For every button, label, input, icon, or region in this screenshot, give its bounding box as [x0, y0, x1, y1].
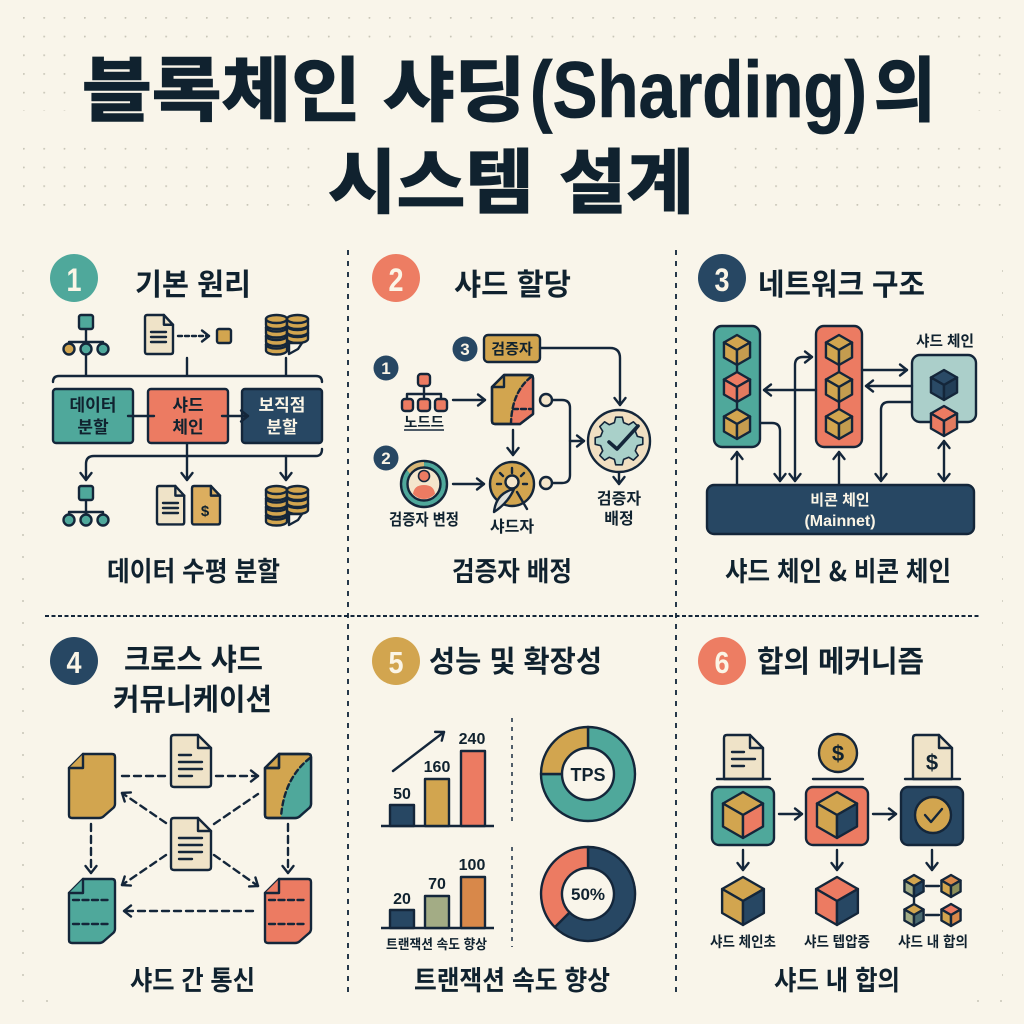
- arrow doc to shard: [512, 430, 514, 455]
- large cube gold: [722, 877, 764, 925]
- dashed separator: [511, 718, 513, 947]
- icon: validator ring: [401, 461, 447, 507]
- number badge 6: [698, 637, 746, 685]
- step two coin and box: $: [832, 741, 844, 766]
- step one document and box: [712, 735, 774, 845]
- number badge 2: 2: [388, 262, 404, 298]
- document coral: [265, 879, 311, 943]
- number badge 2: [372, 254, 420, 302]
- box: data split: [53, 389, 133, 443]
- box: third split: [242, 389, 322, 443]
- heading 6: 합의 메커니즘: [757, 637, 924, 681]
- title: [82, 35, 936, 228]
- bar chart bottom: [381, 857, 494, 953]
- network arrows: [737, 357, 944, 484]
- box: data split: 분할: [77, 413, 109, 438]
- center document top: [171, 735, 211, 787]
- step badge 1: [374, 356, 398, 380]
- validator assignment label: 검증자: [597, 485, 641, 509]
- title: 블록체인: [82, 35, 361, 136]
- heading 4: 커뮤니케이션: [113, 675, 272, 719]
- validator tag: [484, 335, 540, 362]
- caption 4: 샤드 간 통신: [130, 959, 255, 998]
- cube labels: 샤드 내 합의: [898, 931, 968, 952]
- title: 시스템: [328, 127, 534, 228]
- bar chart top: 160: [424, 759, 450, 776]
- shard chain label: 샤드 체인: [916, 330, 974, 351]
- heading 4: [113, 635, 272, 719]
- validator assignment label: [597, 485, 641, 529]
- heading 2: 샤드 할당: [454, 260, 571, 304]
- heading 5: 성능 및 확장성: [429, 637, 602, 681]
- heading 3: 네트워크 구조: [758, 260, 925, 304]
- heading 4: 크로스 샤드: [124, 635, 263, 679]
- shard chain column coral: [816, 326, 862, 447]
- box: data split: 데이터: [70, 391, 116, 416]
- beacon chain bar: (Mainnet): [804, 513, 876, 530]
- bar chart bottom: 20: [393, 891, 411, 908]
- donut: 50%: [541, 847, 635, 941]
- number badge 4: [50, 637, 98, 685]
- icon: gear with check: [588, 410, 650, 472]
- connector from shard and doc to gear: [540, 394, 584, 489]
- box: third split: 분할: [266, 413, 298, 438]
- bar chart bottom: 100: [459, 857, 485, 874]
- node label: 노드드: [404, 412, 444, 432]
- bar chart top: [381, 731, 494, 826]
- panel 2: shard allocation: [372, 254, 650, 589]
- step badge 2: 2: [381, 449, 391, 468]
- caption 6: 샤드 내 합의: [774, 959, 900, 998]
- beacon chain bar: 비콘 체인: [810, 489, 870, 510]
- arrow validator to gear: [540, 348, 620, 405]
- number badge 5: [372, 637, 420, 685]
- arrow node to shard doc: [453, 399, 485, 401]
- number badge 3: 3: [714, 262, 730, 298]
- step three document and box: [901, 735, 963, 845]
- icon: shard document: [492, 375, 533, 424]
- validator tag: 검증자: [491, 338, 533, 359]
- title: 샤딩: [383, 35, 526, 136]
- process arrows: [743, 814, 932, 870]
- number badge 1: [50, 254, 98, 302]
- step badge 1: 1: [381, 359, 391, 378]
- icon: documents: $: [201, 503, 210, 520]
- cube labels: 샤드 체인초: [710, 931, 776, 952]
- shard label: 샤드자: [490, 513, 534, 537]
- donut: TPS: [541, 727, 635, 821]
- panel 4: cross-shard communication: [50, 635, 311, 998]
- shard chain box light: [912, 355, 976, 436]
- caption 3: 샤드 체인 & 비콘 체인: [725, 550, 951, 589]
- box: shard chain: [148, 389, 228, 443]
- document gold: [69, 754, 115, 818]
- icon: org chart top: [64, 315, 108, 354]
- bar chart top: 50: [393, 786, 411, 803]
- title: 의: [874, 35, 936, 136]
- caption 1: 데이터 수평 분할: [107, 550, 280, 589]
- step badge 3: [452, 336, 478, 362]
- validator select label: 검증자 변정: [389, 506, 459, 530]
- step badge 2: [374, 446, 398, 470]
- icon: node tree: [402, 374, 447, 411]
- beacon chain bar: [707, 485, 974, 534]
- number badge 5: 5: [388, 645, 404, 680]
- icon: documents: [157, 486, 220, 524]
- number badge 4: 4: [66, 645, 82, 680]
- title: 설계: [559, 127, 694, 228]
- number badge 1: 1: [66, 262, 82, 298]
- arrow ring to shard: [453, 483, 484, 485]
- title: (Sharding): [530, 45, 867, 134]
- donut: TPS: TPS: [570, 765, 606, 785]
- box: third split: 보직점: [259, 391, 305, 416]
- step three document and box: $: [926, 750, 938, 775]
- step badge 3: 3: [460, 340, 470, 359]
- cube labels: [710, 931, 968, 952]
- box: shard chain: 체인: [172, 413, 204, 438]
- icon: database bottom: [266, 486, 308, 526]
- bottom bracket arrows: [86, 444, 322, 480]
- arrow gear to label: [618, 473, 620, 484]
- icon: database top: [266, 315, 308, 354]
- icon: document to block: [145, 315, 231, 354]
- caption 2: 검증자 배정: [452, 550, 572, 589]
- step two coin and box: [806, 734, 868, 845]
- bar chart top: 240: [459, 731, 485, 748]
- connecting arrows: [128, 415, 248, 417]
- dashed arrows: [91, 776, 288, 911]
- icon: org chart bottom: [64, 486, 108, 526]
- heading 1: 기본 원리: [135, 260, 251, 304]
- cube cluster: [904, 875, 961, 926]
- document teal: [69, 879, 115, 943]
- donut: 50%: 50%: [571, 885, 605, 904]
- document gold and teal: [265, 754, 311, 818]
- panel 5: performance and scalability: [372, 637, 635, 998]
- icon: shard sun badge: [490, 462, 534, 512]
- top bracket: [53, 356, 322, 382]
- caption 5: 트랜잭션 속도 향상: [414, 959, 610, 998]
- large cube coral: [816, 877, 858, 925]
- number badge 3: [698, 254, 746, 302]
- bar chart bottom: 트랜잭션 속도 향상: [386, 933, 488, 953]
- center document bottom: [171, 818, 211, 870]
- shard chain column teal: [714, 326, 760, 447]
- cube labels: 샤드 텝압증: [804, 931, 870, 952]
- panel 1: basic principle: [50, 254, 322, 589]
- panel 6: consensus mechanism: [698, 637, 968, 998]
- panel 3: network structure: [698, 254, 976, 589]
- box: shard chain: 샤드: [172, 391, 204, 416]
- bar chart bottom: 70: [428, 876, 446, 893]
- number badge 6: 6: [714, 645, 730, 680]
- validator assignment label: 배정: [604, 505, 634, 529]
